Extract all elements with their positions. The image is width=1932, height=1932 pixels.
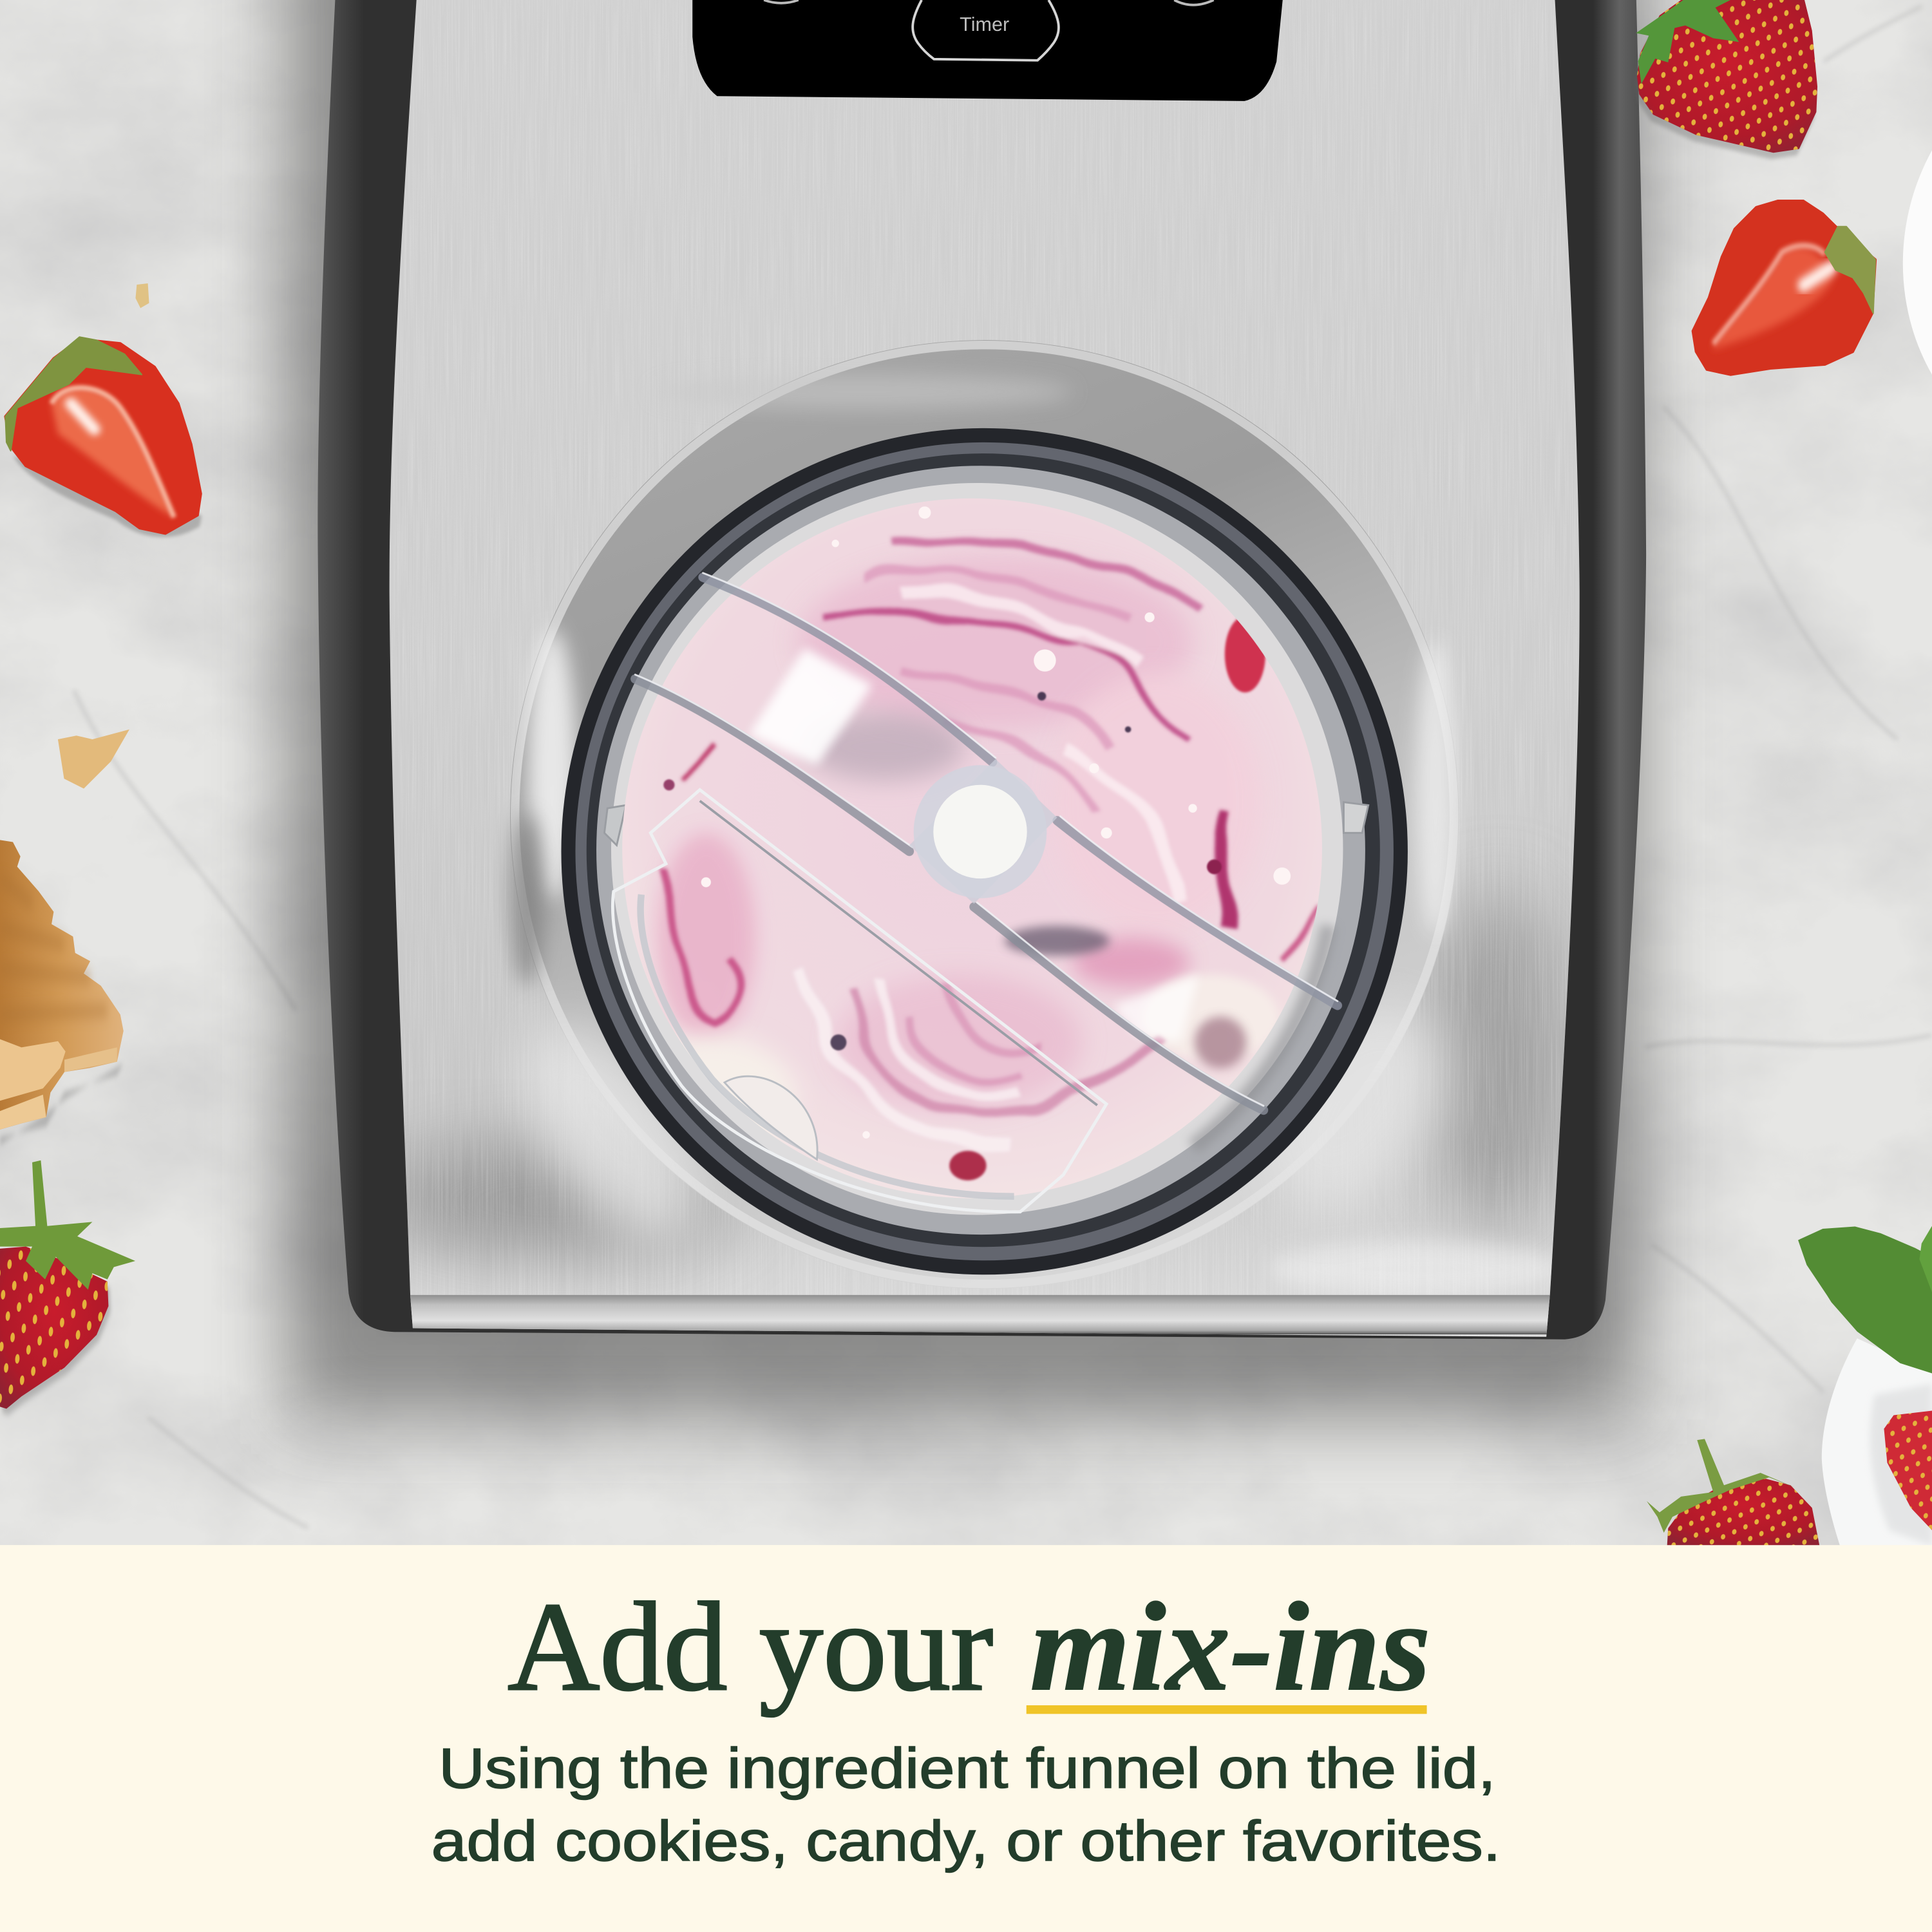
- ice cream maker body: [317, 0, 1646, 1343]
- white bowl bottom right with fruit and mint: [1798, 1226, 1932, 1546]
- caption band: [0, 1545, 1932, 1932]
- lid center hub: [909, 759, 1057, 904]
- right button arc: [1174, 0, 1214, 5]
- machine drop shadow: [286, 0, 1641, 1419]
- calyx and stem: [0, 1160, 135, 1290]
- white bowl top right: [1903, 150, 1932, 375]
- heading: Add your: [507, 1576, 993, 1717]
- heading: mix-ins: [1030, 1576, 1430, 1717]
- heading underline: [1027, 1705, 1427, 1714]
- timer button: [913, 0, 1059, 61]
- lid tab right: [1343, 802, 1368, 833]
- timer label: Timer: [960, 14, 1009, 35]
- left button arc: [764, 0, 799, 3]
- heading: [507, 1576, 1430, 1717]
- stainless steel panel: [370, 0, 1602, 1343]
- funnel drop: [724, 1076, 817, 1159]
- strawberry slice left: [5, 337, 202, 537]
- whole strawberry bottom right: [1647, 1439, 1819, 1546]
- calyx: [1636, 0, 1739, 84]
- mixing bowl and lid: [489, 340, 1479, 1289]
- mint leaf large: [1798, 1227, 1932, 1374]
- waffle crumb large: [58, 730, 129, 788]
- whole strawberry top right: [1635, 0, 1817, 159]
- waffle crumb small: [135, 283, 149, 308]
- whole strawberry lower left: [0, 1160, 135, 1415]
- dark housing: [317, 0, 1646, 1340]
- lid rib lower: [635, 675, 1264, 1110]
- lid rib upper: [703, 573, 1338, 1005]
- marble countertop background: [0, 0, 1932, 1545]
- control panel: [692, 0, 1283, 101]
- lid and bowl, drawn in zoomed coordinates: [561, 428, 1408, 1274]
- ingredient funnel: [612, 790, 1106, 1212]
- body copy: add cookies, candy, or other favorites.: [431, 1809, 1501, 1873]
- calyx: [1825, 227, 1875, 313]
- calyx and stem: [1647, 1439, 1795, 1533]
- mint leaf small: [1919, 1226, 1932, 1293]
- lid tab left: [604, 805, 626, 845]
- dark gasket ring: [561, 428, 1408, 1274]
- calyx: [5, 337, 142, 451]
- ice cream swirl: [607, 488, 1347, 1209]
- body copy: Using the ingredient funnel on the lid,: [439, 1736, 1496, 1800]
- strawberry slice right: [1693, 201, 1875, 374]
- steel well: [489, 340, 1479, 1289]
- waffle cone: [0, 840, 124, 1145]
- body copy: [431, 1736, 1501, 1873]
